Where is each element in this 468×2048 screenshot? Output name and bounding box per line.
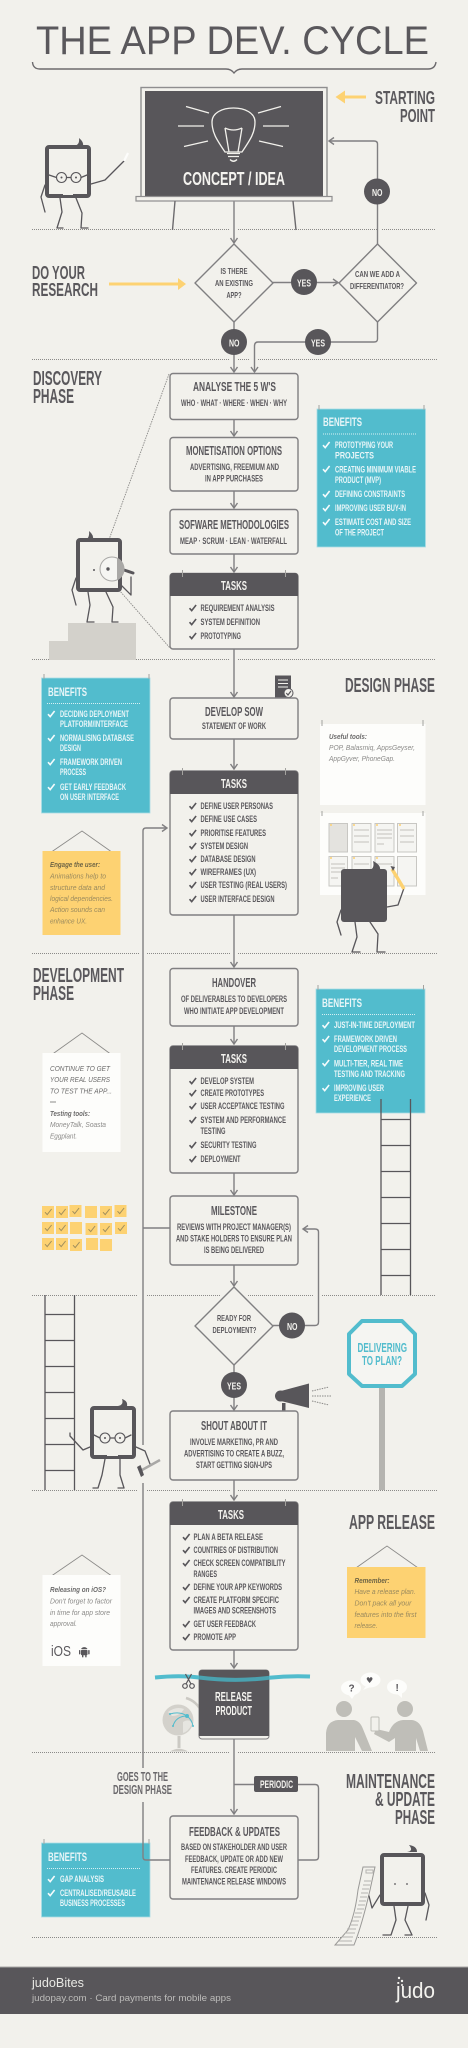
panel: design benefits: FRAMEWORK DRIVEN [60, 757, 122, 767]
panel: design benefits: NORMALISING DATABASE [60, 733, 134, 743]
icon: android [79, 1647, 90, 1657]
decision: existing app: IS THERE [220, 266, 248, 276]
panel: design benefits: PROCESS [60, 767, 86, 777]
note: engage the user [42, 831, 120, 935]
panel: discovery benefits: BENEFITS [323, 415, 362, 429]
box: handover [170, 968, 298, 1026]
panel: discovery benefits: OF THE PROJECT [335, 528, 384, 538]
heading: starting point: POINT [400, 106, 435, 126]
badge: no: NO [287, 1322, 298, 1333]
note: remember: features into the first [354, 1610, 417, 1619]
logo: judo: judo [395, 1978, 435, 2003]
panel: development tasks: USER ACCEPTANCE TESTING [200, 1101, 284, 1111]
panel: development benefits: JUST-IN-TIME DEPLOYMENT [334, 1020, 415, 1030]
panel: design benefits [42, 674, 150, 813]
badge: yes [291, 269, 317, 295]
panel: release tasks: RANGES [194, 1569, 217, 1579]
note: continue to get real users: YOUR REAL USERS [50, 1075, 110, 1084]
box: handover: HANDOVER [212, 975, 256, 990]
panel: design benefits: GET EARLY FEEDBACK [60, 782, 126, 792]
box: shout about it: INVOLVE MARKETING, PR AND [190, 1437, 278, 1447]
footer: judopay.com · Card payments for mobile apps [31, 1993, 231, 2004]
panel: maintenance benefits: CENTRALISED/REUSABLE [60, 1888, 136, 1898]
panel: design tasks: TASKS [221, 776, 247, 791]
box: shout about it [170, 1411, 298, 1480]
flow connectors [143, 141, 378, 1814]
heading: starting point: STARTING [375, 88, 435, 108]
badge: yes: YES [227, 1380, 241, 1392]
box: handover: WHO INITIATE APP DEVELOPMENT [184, 1006, 284, 1016]
icon: megaphone [275, 1384, 331, 1411]
box: monetisation options [170, 438, 298, 491]
panel: discovery tasks: PROTOTYPING [200, 631, 241, 641]
box: software methodologies: MEAP · SCRUM · LEAN · WATERFALL [180, 536, 287, 546]
note: engage the user: logical dependencies. [50, 894, 113, 903]
heading: do your research [32, 263, 98, 300]
panel: development tasks: TESTING [200, 1126, 226, 1136]
blackboard: concept / idea [136, 88, 332, 230]
panel: design tasks: DEFINE USE CASES [200, 814, 257, 824]
panel: discovery benefits: PROJECTS [335, 450, 374, 460]
panel: design tasks: DEFINE USER PERSONAS [200, 801, 273, 811]
left ladder [45, 1295, 74, 1490]
footer: judoBites [31, 1976, 84, 1990]
badge: yes: YES [311, 338, 325, 350]
panel: discovery benefits: IMPROVING USER BUY-IN [335, 503, 406, 513]
character: tablet with magnifier [72, 531, 133, 622]
magnifier guide lines [102, 374, 170, 648]
heading: discovery phase: PHASE [33, 386, 74, 408]
badge: yes: YES [297, 278, 311, 290]
box: analyse the 5 Ws: WHO · WHAT · WHERE · WHEN · WHY [181, 398, 287, 408]
panel: design tasks: PRIORITISE FEATURES [200, 828, 266, 838]
loop connectors: goes to design phase and periodic [143, 1784, 318, 1860]
heading: maintenance and update phase: PHASE [395, 1807, 435, 1829]
people with speech bubbles: ? [348, 1684, 355, 1694]
box: feedback and updates [170, 1816, 298, 1899]
decision: differentiator: DIFFERENTIATOR? [350, 281, 404, 291]
box: shout about it: SHOUT ABOUT IT [201, 1418, 267, 1433]
panel: development tasks: CREATE PROTOTYPES [200, 1088, 264, 1098]
panel: design tasks: WIREFRAMES (UX) [200, 867, 256, 877]
note: continue to get real users: Eggplant. [50, 1132, 77, 1140]
decision: ready for deployment: READY FOR [217, 1313, 251, 1323]
box: analyse the 5 Ws [170, 374, 298, 420]
people with speech bubbles: ! [396, 1683, 399, 1694]
card: useful tools [320, 720, 426, 805]
panel: development benefits: TESTING AND TRACKING [334, 1069, 405, 1079]
decision: ready for deployment [195, 1287, 273, 1365]
card: useful tools: AppGyver, PhoneGap. [328, 754, 395, 763]
panel: design tasks [170, 768, 298, 915]
note: continue to get real users: CONTINUE TO GET [50, 1064, 110, 1073]
box: handover: OF DELIVERABLES TO DEVELOPERS [181, 994, 287, 1004]
panel: design tasks: DATABASE DESIGN [200, 854, 256, 864]
box: milestone: MILESTONE [211, 1203, 257, 1218]
badge: no [364, 178, 390, 204]
box: shout about it: ADVERTISING TO CREATE A BUZZ, [184, 1448, 284, 1458]
right ladder [381, 1099, 410, 1295]
card: useful tools: POP, Balasmiq, AppsGeyser, [329, 743, 415, 752]
badge: yes [221, 1372, 247, 1398]
panel: design tasks: USER INTERFACE DESIGN [200, 894, 274, 904]
panel: development benefits: DEVELOPMENT PROCESS [334, 1044, 407, 1054]
box: monetisation options: MONETISATION OPTIONS [186, 443, 282, 458]
note: engage the user: enhance UX. [50, 916, 87, 926]
footer [0, 1967, 468, 2014]
box: develop sow: STATEMENT OF WORK [202, 721, 266, 731]
box: feedback and updates: MAINTENANCE RELEASE WINDOWS [182, 1876, 286, 1886]
panel: discovery tasks: TASKS [221, 578, 247, 593]
icon: light bulb [178, 106, 289, 161]
box: milestone: REVIEWS WITH PROJECT MANAGER(S) [177, 1222, 291, 1232]
note: continue to get real users: MoneyTalk, Soasta [50, 1120, 106, 1129]
panel: development tasks [170, 1043, 298, 1173]
note: remember [347, 1546, 426, 1638]
sign: delivering to plan [349, 1321, 415, 1490]
note: releasing on iOS: Releasing on iOS? [50, 1585, 106, 1594]
box: milestone: IS BEING DELIVERED [204, 1245, 264, 1255]
sticky notes [42, 1205, 127, 1251]
panel: discovery benefits: CREATING MINIMUM VIABLE [335, 464, 416, 474]
note: remember: release. [354, 1621, 378, 1630]
note: continue to get real users [42, 1033, 120, 1152]
note: engage the user: Action sounds can [49, 905, 105, 914]
icon: scissors [183, 1674, 194, 1688]
panel: development benefits: MULTI-TIER, REAL TIME [334, 1058, 403, 1068]
panel: discovery benefits: ESTIMATE COST AND SIZE [335, 517, 411, 527]
box: analyse the 5 Ws: ANALYSE THE 5 W'S [193, 379, 276, 394]
character: tablet with receipt [335, 1845, 429, 1945]
badge: no: NO [372, 188, 383, 199]
note: releasing on iOS: in time for app store [50, 1608, 110, 1617]
panel: development benefits [316, 985, 425, 1113]
panel: maintenance benefits: BENEFITS [48, 1850, 87, 1864]
panel: development benefits: FRAMEWORK DRIVEN [334, 1034, 397, 1044]
panel: discovery tasks: SYSTEM DEFINITION [200, 617, 260, 627]
title: THE APP DEV. CYCLE [36, 19, 429, 63]
panel: release tasks: DEFINE YOUR APP KEYWORDS [194, 1582, 282, 1592]
panel: discovery benefits [317, 405, 426, 547]
people with speech bubbles [326, 1672, 428, 1751]
box: monetisation options: ADVERTISING, FREEMIUM AND [190, 462, 279, 472]
icon: hammer [137, 1460, 160, 1477]
note: remember: Remember: [354, 1576, 390, 1585]
panel: discovery benefits: PRODUCT (MVP) [335, 475, 381, 485]
card: useful tools: Useful tools: [329, 732, 367, 741]
box: feedback and updates: FEEDBACK, UPDATE OR ADD NEW [185, 1854, 283, 1864]
panel: development tasks: SYSTEM AND PERFORMANCE [200, 1115, 286, 1125]
panel: development tasks: SECURITY TESTING [200, 1140, 256, 1150]
note: engage the user: structure data and [50, 883, 106, 892]
panel: discovery benefits: PROTOTYPING YOUR [335, 440, 393, 450]
heading: development phase: PHASE [33, 983, 74, 1005]
heading: discovery phase: DISCOVERY [33, 368, 102, 390]
arrow: starting point [336, 90, 366, 104]
panel: release tasks: GET USER FEEDBACK [194, 1619, 256, 1629]
panel: maintenance benefits [42, 1839, 150, 1917]
label: goes to the design phase: DESIGN PHASE [113, 1782, 172, 1797]
panel: development benefits: EXPERIENCE [334, 1093, 371, 1103]
panel: design benefits: PLATFORM/INTERFACE [60, 719, 128, 729]
panel: release tasks: PROMOTE APP [194, 1632, 236, 1642]
decision: existing app: APP? [226, 290, 242, 300]
heading: maintenance and update phase [346, 1771, 435, 1829]
note: releasing on iOS [42, 1555, 120, 1666]
panel: development tasks: DEVELOP SYSTEM [200, 1076, 254, 1086]
box: shout about it: START GETTING SIGN-UPS [196, 1460, 272, 1470]
character: tablet teacher [41, 138, 128, 228]
panel: maintenance benefits: BUSINESS PROCESSES [60, 1898, 125, 1908]
people with speech bubbles: ♥ [366, 1676, 373, 1685]
decision: differentiator: CAN WE ADD A [355, 269, 400, 279]
box: feedback and updates: FEATURES. CREATE PERIODIC [191, 1865, 277, 1875]
icon: globe [162, 1698, 203, 1752]
panel: design benefits: BENEFITS [48, 685, 87, 699]
box: software methodologies [170, 510, 298, 554]
panel: release tasks: CREATE PLATFORM SPECIFIC [194, 1595, 279, 1605]
sign: delivering to plan: DELIVERING [358, 1340, 407, 1355]
box: software methodologies: SOFWARE METHODOLOGIES [179, 517, 289, 532]
panel: release tasks: CHECK SCREEN COMPATIBILITY [194, 1558, 286, 1568]
panel: release tasks [170, 1499, 298, 1650]
label: periodic: PERIODIC [260, 1779, 293, 1791]
box: release product: RELEASE [215, 1689, 252, 1704]
note: releasing on iOS: iOS [51, 1643, 71, 1660]
box: milestone [170, 1196, 298, 1265]
label: goes to the design phase [113, 1769, 172, 1797]
panel: development benefits: BENEFITS [322, 996, 362, 1010]
board label: CONCEPT / IDEA [183, 169, 285, 189]
heading: development phase: DEVELOPMENT [33, 965, 124, 987]
panel: discovery tasks: REQUIREMENT ANALYSIS [200, 603, 274, 613]
label: goes to the design phase: GOES TO THE [117, 1769, 168, 1784]
panel: release tasks: IMAGES AND SCREENSHOTS [194, 1606, 276, 1616]
decision: ready for deployment: DEPLOYMENT? [212, 1325, 256, 1335]
note: releasing on iOS: approval. [50, 1619, 77, 1628]
panel: development tasks: DEPLOYMENT [200, 1154, 241, 1164]
heading: do your research: RESEARCH [32, 280, 98, 300]
ribbon [155, 1676, 310, 1680]
panel: release tasks: TASKS [218, 1507, 244, 1522]
decision: existing app [195, 244, 273, 322]
character: tablet drawing [337, 861, 404, 952]
note: releasing on iOS: Don't forget to factor [50, 1596, 112, 1606]
panel: maintenance benefits: GAP ANALYSIS [60, 1874, 104, 1884]
panel: design benefits: DESIGN [60, 743, 81, 753]
note: continue to get real users: TO TEST THE APP... [50, 1086, 112, 1096]
decision: differentiator [339, 244, 416, 322]
box: milestone: AND STAKE HOLDERS TO ENSURE PLAN [176, 1234, 292, 1244]
box: feedback and updates: BASED ON STAKEHOLDER AND USER [181, 1842, 287, 1852]
heading: starting point [375, 88, 435, 126]
panel: development benefits: IMPROVING USER [334, 1083, 384, 1093]
panel: release tasks: COUNTRIES OF DISTRIBUTION [194, 1545, 278, 1555]
box: develop sow: DEVELOP SOW [205, 704, 263, 719]
note: engage the user: Engage the user: [50, 860, 100, 869]
label: periodic [254, 1776, 298, 1792]
character: tablet with hammer [70, 1399, 160, 1488]
sign: delivering to plan: TO PLAN? [362, 1353, 402, 1368]
badge: no [221, 329, 247, 355]
note: remember: Don't pack all your [354, 1598, 412, 1608]
note: remember: Have a release plan. [354, 1587, 416, 1596]
icon: document [275, 676, 293, 698]
badge: no: NO [229, 338, 240, 350]
steps [49, 623, 136, 660]
note: continue to get real users: Testing tools: [50, 1109, 90, 1118]
box: develop sow [170, 698, 298, 739]
panel: design tasks: USER TESTING (REAL USERS) [200, 880, 287, 890]
badge: yes [305, 329, 331, 355]
box: monetisation options: IN APP PURCHASES [205, 474, 263, 484]
box: feedback and updates: FEEDBACK & UPDATES [189, 1824, 280, 1839]
heading: discovery phase [33, 368, 102, 408]
panel: design tasks: SYSTEM DESIGN [200, 841, 248, 851]
arrow: research [109, 278, 186, 290]
panel: design benefits: ON USER INTERFACE [60, 792, 119, 802]
title brace [32, 62, 436, 73]
heading: do your research: DO YOUR [32, 263, 85, 283]
panel: discovery tasks [170, 570, 298, 649]
panel: release tasks: PLAN A BETA RELEASE [194, 1532, 263, 1542]
note: engage the user: Animations help to [49, 872, 106, 880]
box: release product: PRODUCT [216, 1703, 252, 1718]
badge: no [279, 1312, 305, 1338]
panel: design benefits: DECIDING DEPLOYMENT [60, 709, 129, 719]
panel: discovery benefits: DEFINING CONSTRAINTS [335, 489, 405, 499]
card: wireframes [320, 811, 426, 895]
panel: development tasks: TASKS [221, 1051, 247, 1066]
heading: development phase [33, 965, 124, 1005]
decision: existing app: AN EXISTING [215, 278, 253, 288]
box: release product [199, 1670, 269, 1739]
